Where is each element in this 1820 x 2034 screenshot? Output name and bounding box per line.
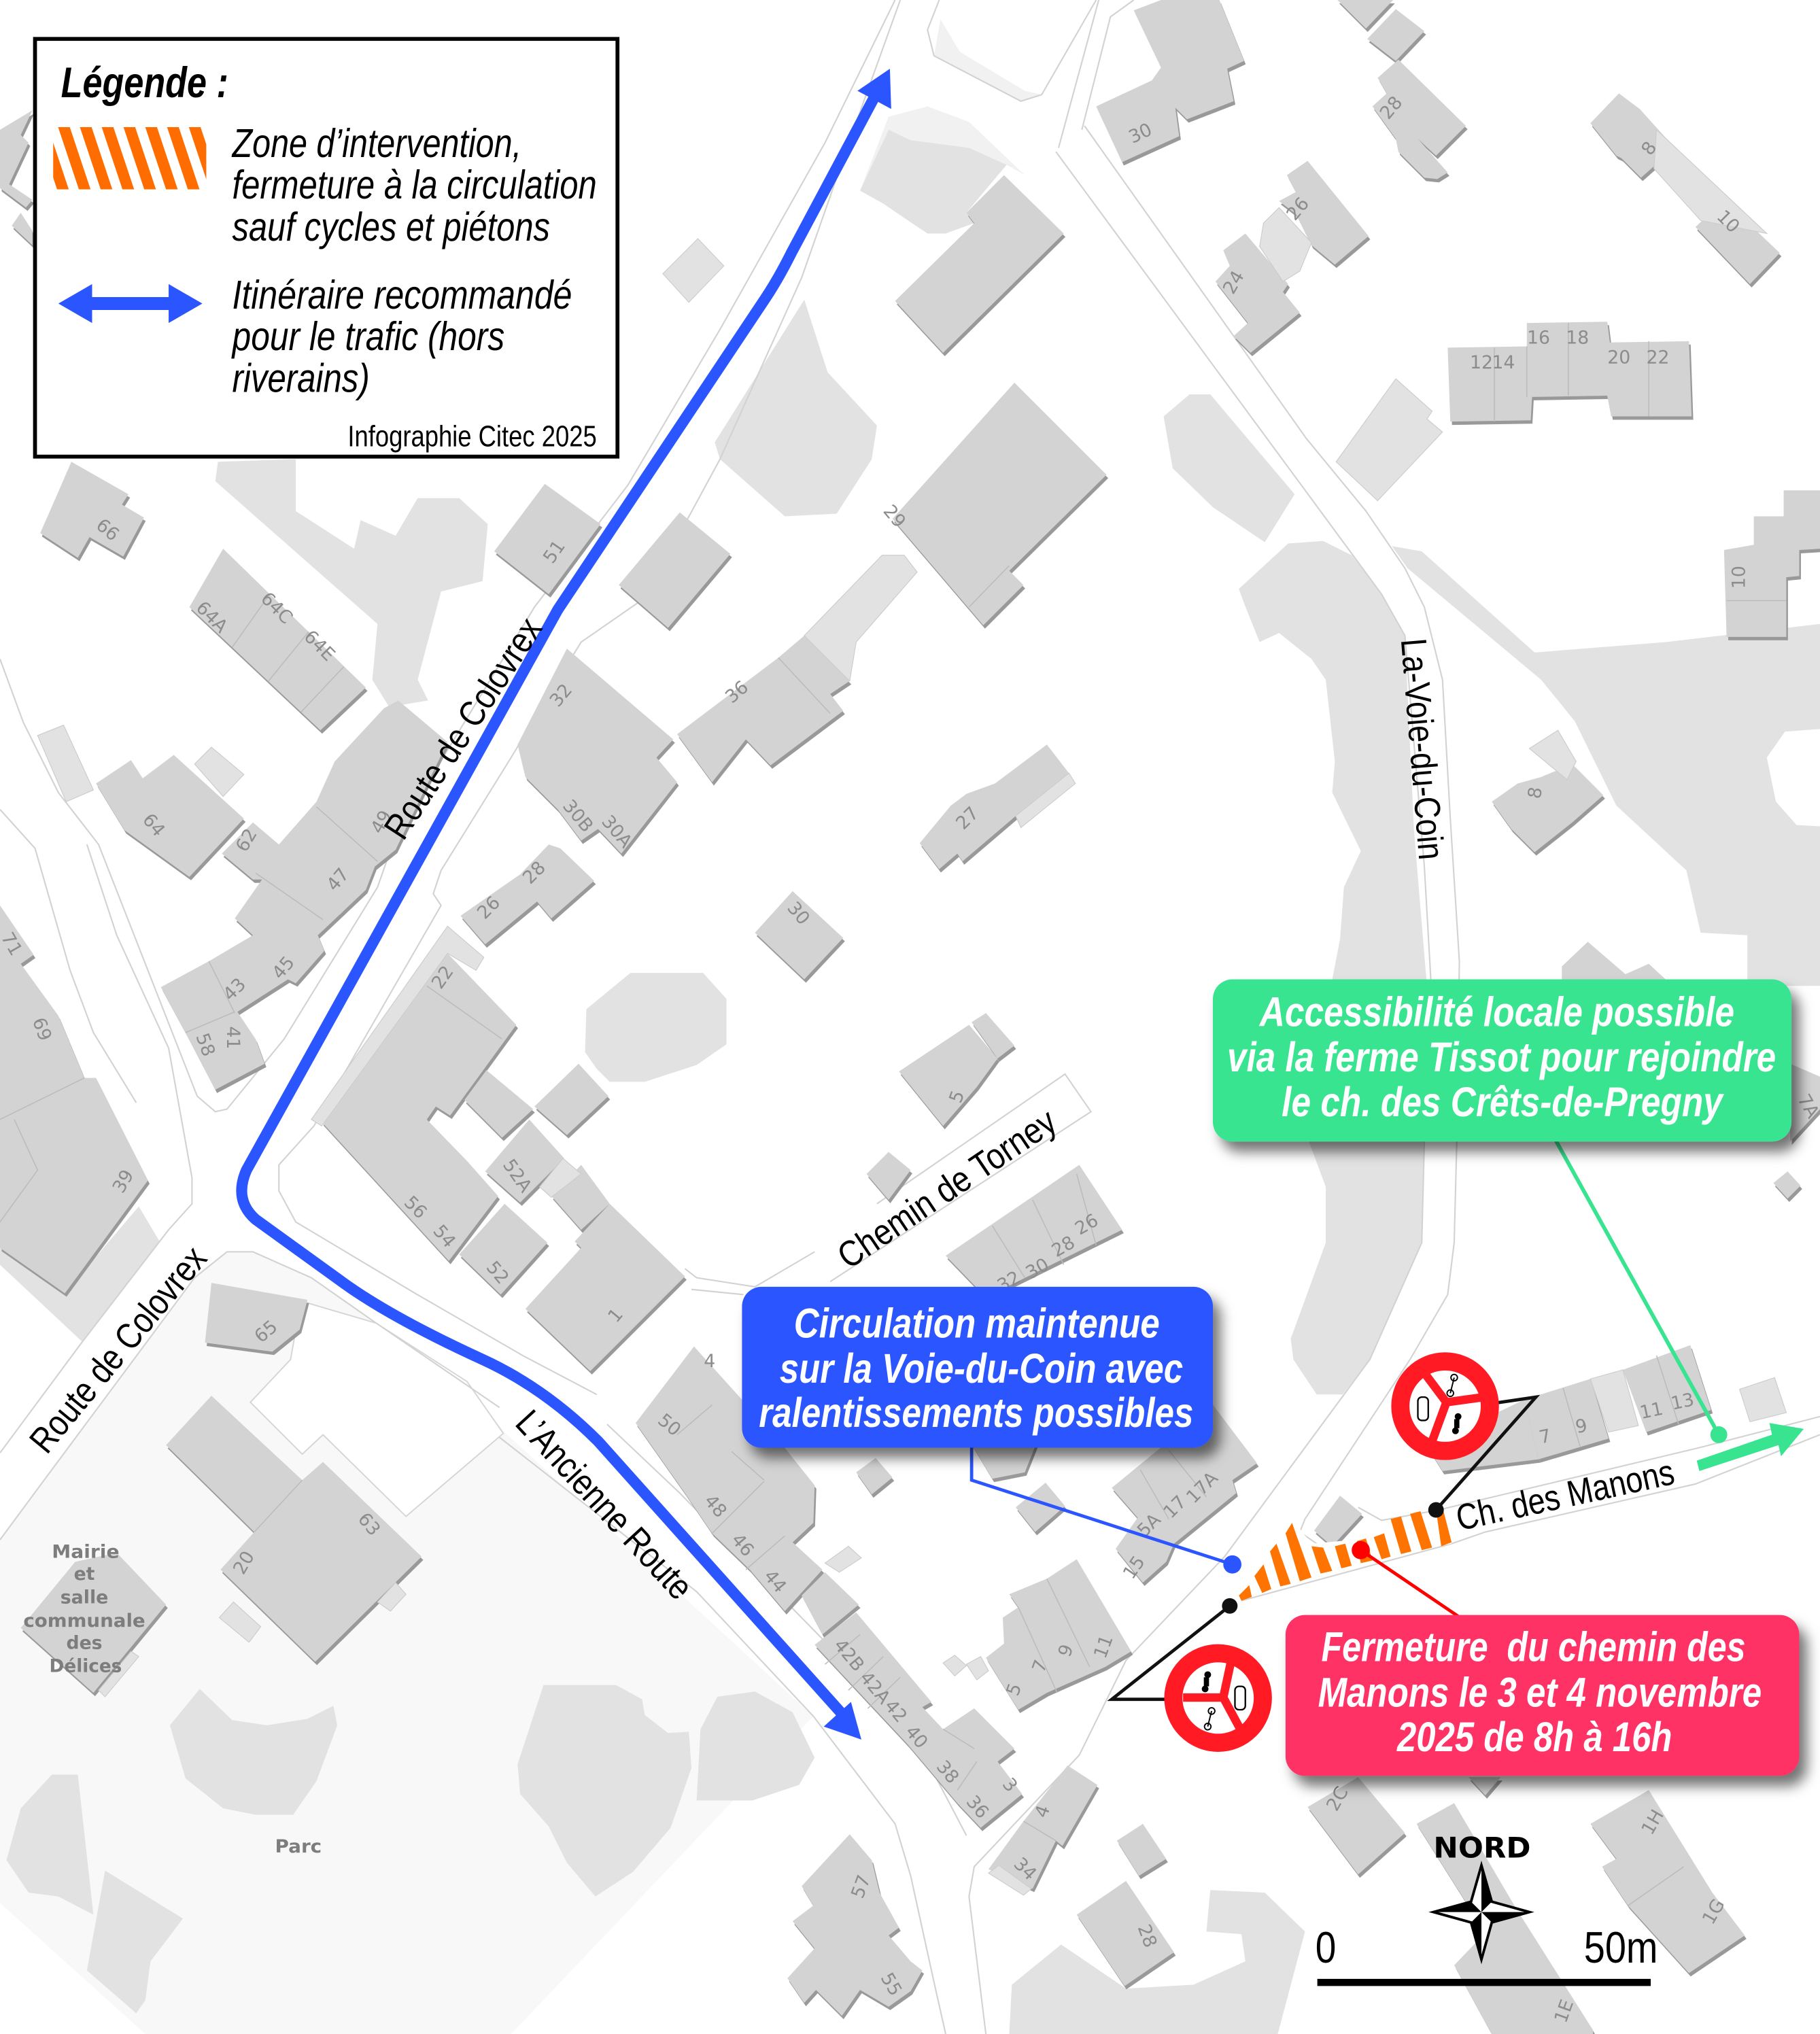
building numbers: 5A	[1133, 1509, 1165, 1541]
leader lines and dots	[972, 1135, 1728, 1700]
legend route text: riverains)	[233, 355, 370, 400]
building numbers: 10	[1713, 206, 1744, 237]
building numbers: 56	[400, 1192, 431, 1223]
building numbers: 46	[727, 1530, 758, 1561]
building numbers: 51	[539, 536, 570, 568]
building numbers: 22	[1647, 347, 1669, 368]
building numbers: 22	[428, 962, 458, 993]
legend double arrow	[58, 284, 203, 323]
building numbers: 64A	[192, 598, 232, 638]
legend closure text: fermeture à la circulation	[233, 162, 597, 207]
building numbers: 20	[229, 1547, 259, 1578]
light sidewalk band	[860, 20, 1042, 190]
street names: Chemin de Torney	[831, 1101, 1064, 1277]
building numbers: 42B	[829, 1635, 868, 1676]
building numbers: 66	[92, 515, 123, 545]
callout: pink	[1286, 1615, 1799, 1776]
building numbers: 52	[482, 1257, 513, 1288]
building numbers: 36	[962, 1791, 993, 1823]
building numbers: 44	[759, 1566, 791, 1597]
legend route text: pour le trafic (hors	[231, 313, 504, 359]
no traffic sign south	[1173, 1653, 1263, 1743]
building numbers: 36	[721, 676, 753, 708]
building numbers: 5	[1002, 1680, 1026, 1699]
callout: green	[1213, 980, 1791, 1141]
building numbers: 11	[1638, 1398, 1665, 1424]
place names: salle	[61, 1587, 108, 1608]
building numbers: 50	[653, 1409, 685, 1441]
building numbers: 12	[1470, 352, 1493, 373]
building numbers: 54	[429, 1221, 460, 1252]
callout: blue: Circulation maintenue	[794, 1300, 1160, 1346]
place names: communale	[23, 1610, 145, 1632]
building numbers: 1E	[1550, 1997, 1578, 2026]
building numbers: 26	[1071, 1210, 1102, 1239]
building numbers: 9	[1574, 1415, 1590, 1438]
legend hatch swatch	[53, 127, 207, 190]
place names	[23, 1542, 322, 1857]
building numbers: 64E	[300, 626, 339, 666]
building numbers: 32	[994, 1267, 1024, 1296]
callout: blue	[742, 1287, 1213, 1448]
building numbers: 47	[322, 864, 354, 895]
white courtyard	[250, 1301, 503, 1517]
callout: green: Accessibilité locale possible	[1258, 988, 1734, 1035]
building numbers: 1H	[1637, 1806, 1668, 1838]
street names: Route de Colovrex	[377, 610, 550, 846]
building numbers: 11	[1090, 1632, 1118, 1661]
building numbers: 17A	[1182, 1467, 1222, 1508]
building numbers: 7	[1537, 1426, 1553, 1448]
place names: des	[66, 1632, 103, 1653]
place names: Parc	[275, 1836, 322, 1857]
building numbers: 57	[847, 1872, 875, 1901]
building numbers: 40	[901, 1721, 932, 1753]
building numbers: 10	[1728, 566, 1749, 589]
building numbers: 43	[219, 974, 250, 1005]
green direction arrow	[1697, 1423, 1804, 1471]
building numbers: 5	[945, 1088, 969, 1106]
building numbers: 1	[604, 1305, 628, 1327]
building numbers: 3	[998, 1774, 1022, 1796]
building numbers: 41	[222, 1027, 243, 1050]
building numbers: 45	[268, 952, 299, 984]
legend route text: Itinéraire recommandé	[233, 272, 572, 317]
building numbers: 30	[783, 898, 814, 929]
building numbers: 30A	[597, 811, 636, 852]
building numbers: 55	[876, 1969, 906, 2000]
north compass: NORD	[1433, 1831, 1531, 1864]
building numbers: 8	[1524, 785, 1547, 800]
building numbers: 30	[1125, 119, 1155, 148]
building divider lines	[0, 323, 1786, 1906]
building numbers: 28	[519, 857, 550, 889]
legend closure text: sauf cycles et piétons	[233, 204, 550, 249]
legend route text	[231, 272, 572, 400]
street names: La-Voie-du-Coin	[1393, 637, 1451, 861]
building numbers: 2C	[1322, 1783, 1353, 1814]
place names: Mairie	[52, 1542, 120, 1563]
hatched closure zone	[1239, 1504, 1452, 1601]
building numbers: 1G	[1698, 1895, 1730, 1928]
building numbers: 49	[366, 807, 396, 838]
building numbers: 30	[1023, 1254, 1052, 1283]
building numbers: 32	[546, 680, 577, 711]
street names: Route de Colovrex	[22, 1239, 215, 1461]
building numbers: 4	[704, 1351, 715, 1372]
building numbers: 48	[700, 1491, 731, 1522]
building numbers: 26	[1282, 193, 1314, 224]
no traffic sign north	[1401, 1362, 1490, 1451]
street names: Ch. des Manons	[1453, 1452, 1678, 1538]
building numbers: 65	[250, 1316, 281, 1347]
callout: blue: ralentissements possibles	[759, 1390, 1193, 1436]
callout: blue: sur la Voie-du-Coin avec	[780, 1345, 1183, 1392]
street names	[22, 610, 1678, 1608]
callout: green: le ch. des Crêts-de-Pregny	[1282, 1079, 1724, 1125]
place names: Délices	[50, 1656, 122, 1677]
building numbers: 38	[932, 1757, 963, 1788]
building numbers: 42A	[855, 1668, 895, 1708]
place names: et	[74, 1564, 95, 1585]
legend closure text	[231, 120, 597, 249]
building numbers: 42	[880, 1695, 911, 1727]
building numbers: 8	[1637, 138, 1661, 159]
building numbers: 64C	[256, 588, 296, 628]
building numbers: 13	[1669, 1389, 1696, 1415]
building numbers: 30B	[558, 795, 598, 836]
building numbers: 20	[1607, 347, 1630, 368]
building numbers: 16	[1527, 328, 1550, 349]
legend credit: Infographie Citec 2025	[347, 419, 597, 453]
north compass	[1433, 1831, 1531, 1959]
building numbers: 62	[232, 825, 262, 856]
building numbers: 58	[191, 1031, 219, 1059]
building numbers: 26	[473, 892, 504, 923]
building numbers: 27	[952, 803, 983, 834]
building numbers: 39	[109, 1166, 138, 1196]
building numbers: 7	[1028, 1657, 1052, 1675]
building numbers: 15	[1119, 1552, 1150, 1583]
building numbers: 34	[1010, 1853, 1041, 1884]
building numbers: 28	[1133, 1922, 1161, 1950]
recommended route arrow	[241, 69, 891, 1740]
building numbers: 18	[1566, 328, 1589, 349]
building numbers: 52A	[498, 1155, 536, 1197]
building numbers: 28	[1376, 92, 1407, 124]
callout: pink: 2025 de 8h à 16h	[1396, 1714, 1672, 1760]
building numbers: 29	[879, 501, 910, 532]
building numbers: 69	[28, 1015, 56, 1044]
building numbers: 14	[1492, 352, 1515, 373]
legend closure text: Zone d’intervention,	[231, 120, 521, 166]
building numbers: 9	[1054, 1642, 1078, 1659]
scale bar: 0	[1316, 1923, 1336, 1972]
legend panel	[35, 39, 617, 457]
building numbers: 64	[138, 810, 169, 841]
park area	[0, 1252, 813, 2034]
building numbers: 63	[354, 1509, 384, 1540]
street names: L’Ancienne Route	[508, 1402, 700, 1608]
building numbers: 24	[1219, 267, 1249, 298]
building numbers: 4	[1031, 1802, 1054, 1821]
scale bar	[1316, 1923, 1658, 1986]
building numbers: 17	[1159, 1492, 1190, 1523]
scale bar: 50m	[1584, 1923, 1658, 1972]
legend title: Légende :	[61, 59, 228, 107]
building numbers: 28	[1048, 1232, 1079, 1262]
